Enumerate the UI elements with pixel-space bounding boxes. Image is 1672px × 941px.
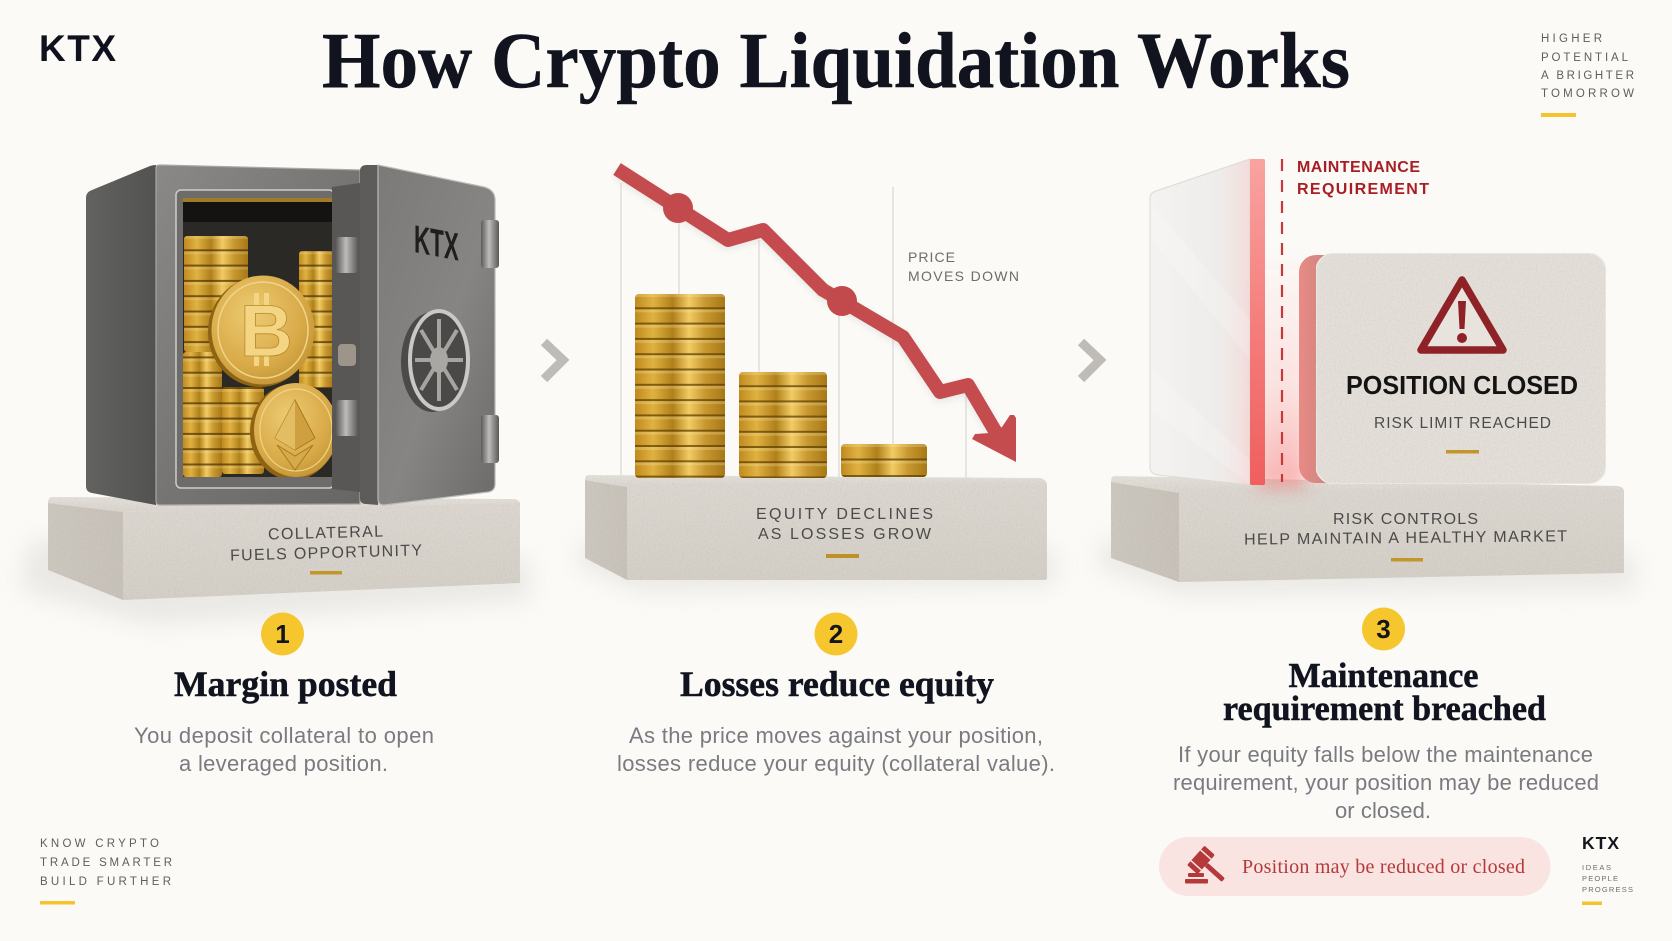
badge 3 xyxy=(1362,608,1405,650)
step 1: margin posted xyxy=(134,612,434,776)
step 3: maintenance requirement breached xyxy=(1159,608,1599,896)
logo block: bottom right: IDEAS xyxy=(1582,863,1611,872)
safe interior xyxy=(183,198,333,477)
label: maintenance requirement: REQUIREMENT xyxy=(1297,181,1429,198)
card: position closed xyxy=(1299,253,1606,484)
plinth: stone base 2 xyxy=(585,475,1047,580)
plinth: stone base 3: HELP MAINTAIN A HEALTHY MARKET xyxy=(1244,528,1567,549)
plinth: stone base 1: FUELS OPPORTUNITY xyxy=(230,542,423,565)
card: position closed: POSITION CLOSED xyxy=(1346,370,1578,400)
description 2 xyxy=(617,723,1055,776)
door hinges left xyxy=(336,237,358,436)
glow behind card xyxy=(1258,250,1306,488)
title: How Crypto Liquidation Works xyxy=(322,18,1350,105)
heading 2: Losses reduce equity xyxy=(680,664,994,704)
plinth: stone base 2: AS LOSSES GROW xyxy=(758,526,932,543)
logo block: bottom right: PROGRESS xyxy=(1582,885,1633,894)
glass panel xyxy=(1150,159,1250,485)
plinth shadow xyxy=(20,540,530,625)
chart label: price moves down: PRICE xyxy=(908,249,955,265)
card: position closed: RISK LIMIT REACHED xyxy=(1374,415,1551,432)
plinth: stone base 2: EQUITY DECLINES xyxy=(756,506,933,523)
tagline: top right xyxy=(1541,33,1634,117)
logo: KTX top left: KTX xyxy=(39,28,116,69)
tagline: top right: TOMORROW xyxy=(1541,88,1634,100)
description 1: a leveraged position. xyxy=(179,751,388,776)
label: maintenance requirement xyxy=(1297,159,1429,198)
callout: position may be reduced or closed xyxy=(1159,837,1550,896)
coin stacks in safe xyxy=(183,236,333,477)
heading 3: Maintenance xyxy=(1288,656,1478,695)
dashed maintenance line xyxy=(1281,159,1283,482)
description 2: As the price moves against your position, xyxy=(629,723,1043,748)
tagline: top right: A BRIGHTER xyxy=(1541,70,1634,82)
plinth: stone base 1: COLLATERAL xyxy=(268,524,383,544)
description 1: You deposit collateral to open xyxy=(134,723,434,748)
badge 3: 3 xyxy=(1376,614,1391,644)
tagline: bottom left: KNOW CRYPTO xyxy=(40,838,159,850)
chart label: price moves down: MOVES DOWN xyxy=(908,268,1019,284)
door label: KTX: KTX xyxy=(414,217,459,269)
plinth: stone base 3 xyxy=(1111,476,1624,582)
tagline: bottom left: BUILD FURTHER xyxy=(40,876,171,888)
price chart grid lines xyxy=(621,183,966,480)
step 2: losses reduce equity xyxy=(617,612,1055,776)
description 3: or closed. xyxy=(1335,798,1431,823)
coin stack: medium xyxy=(739,372,827,478)
description 1 xyxy=(134,723,434,776)
arrow: step 1 to step 2 xyxy=(544,342,563,379)
red edge xyxy=(1250,159,1265,485)
badge 2: 2 xyxy=(829,619,843,649)
chart label: price moves down xyxy=(908,249,1019,284)
heading 3 xyxy=(1223,656,1547,728)
arrow: step 2 to step 3 xyxy=(1081,342,1100,379)
logo block: bottom right xyxy=(1582,833,1633,905)
logo block: bottom right: PEOPLE xyxy=(1582,874,1618,883)
price line arrow xyxy=(617,169,1016,462)
callout: position may be reduced or closed: Position may be reduced or closed xyxy=(1242,856,1525,878)
panel: losses reduce equity illustration xyxy=(575,169,1055,592)
description 3: requirement, your position may be reduced xyxy=(1173,770,1599,795)
tagline: top right: POTENTIAL xyxy=(1541,52,1629,64)
plinth: stone base 1 xyxy=(48,497,520,600)
badge 1 xyxy=(261,612,304,656)
description 3 xyxy=(1173,742,1599,823)
badge 1: 1 xyxy=(275,619,290,649)
panel: margin posted illustration xyxy=(20,165,530,625)
description 3: If your equity falls below the maintenance xyxy=(1178,742,1593,767)
dial xyxy=(401,311,468,412)
coin stack: tall xyxy=(635,294,725,478)
coin: bitcoin: B xyxy=(240,291,293,372)
door xyxy=(332,183,360,492)
logo block: bottom right: KTX xyxy=(1582,833,1619,853)
tagline: top right: HIGHER xyxy=(1541,33,1602,45)
hinges right xyxy=(481,220,499,463)
label: maintenance requirement: MAINTENANCE xyxy=(1297,159,1420,176)
plinth: stone base 3: RISK CONTROLS xyxy=(1333,511,1478,528)
tagline: bottom left xyxy=(40,838,172,904)
lock plate xyxy=(338,344,356,366)
icon: gavel xyxy=(1185,846,1232,890)
icon: warning triangle xyxy=(1421,280,1503,350)
badge 2 xyxy=(814,612,858,656)
safe xyxy=(86,165,499,505)
coin: ethereum xyxy=(250,383,338,480)
coin stack: short xyxy=(841,444,927,477)
tagline: bottom left: TRADE SMARTER xyxy=(40,857,172,869)
panel: maintenance requirement illustration xyxy=(1095,159,1635,595)
coin: bitcoin xyxy=(208,276,314,387)
heading 3: requirement breached xyxy=(1223,689,1547,728)
description 2: losses reduce your equity (collateral value). xyxy=(617,751,1055,776)
heading 1: Margin posted xyxy=(174,664,397,704)
